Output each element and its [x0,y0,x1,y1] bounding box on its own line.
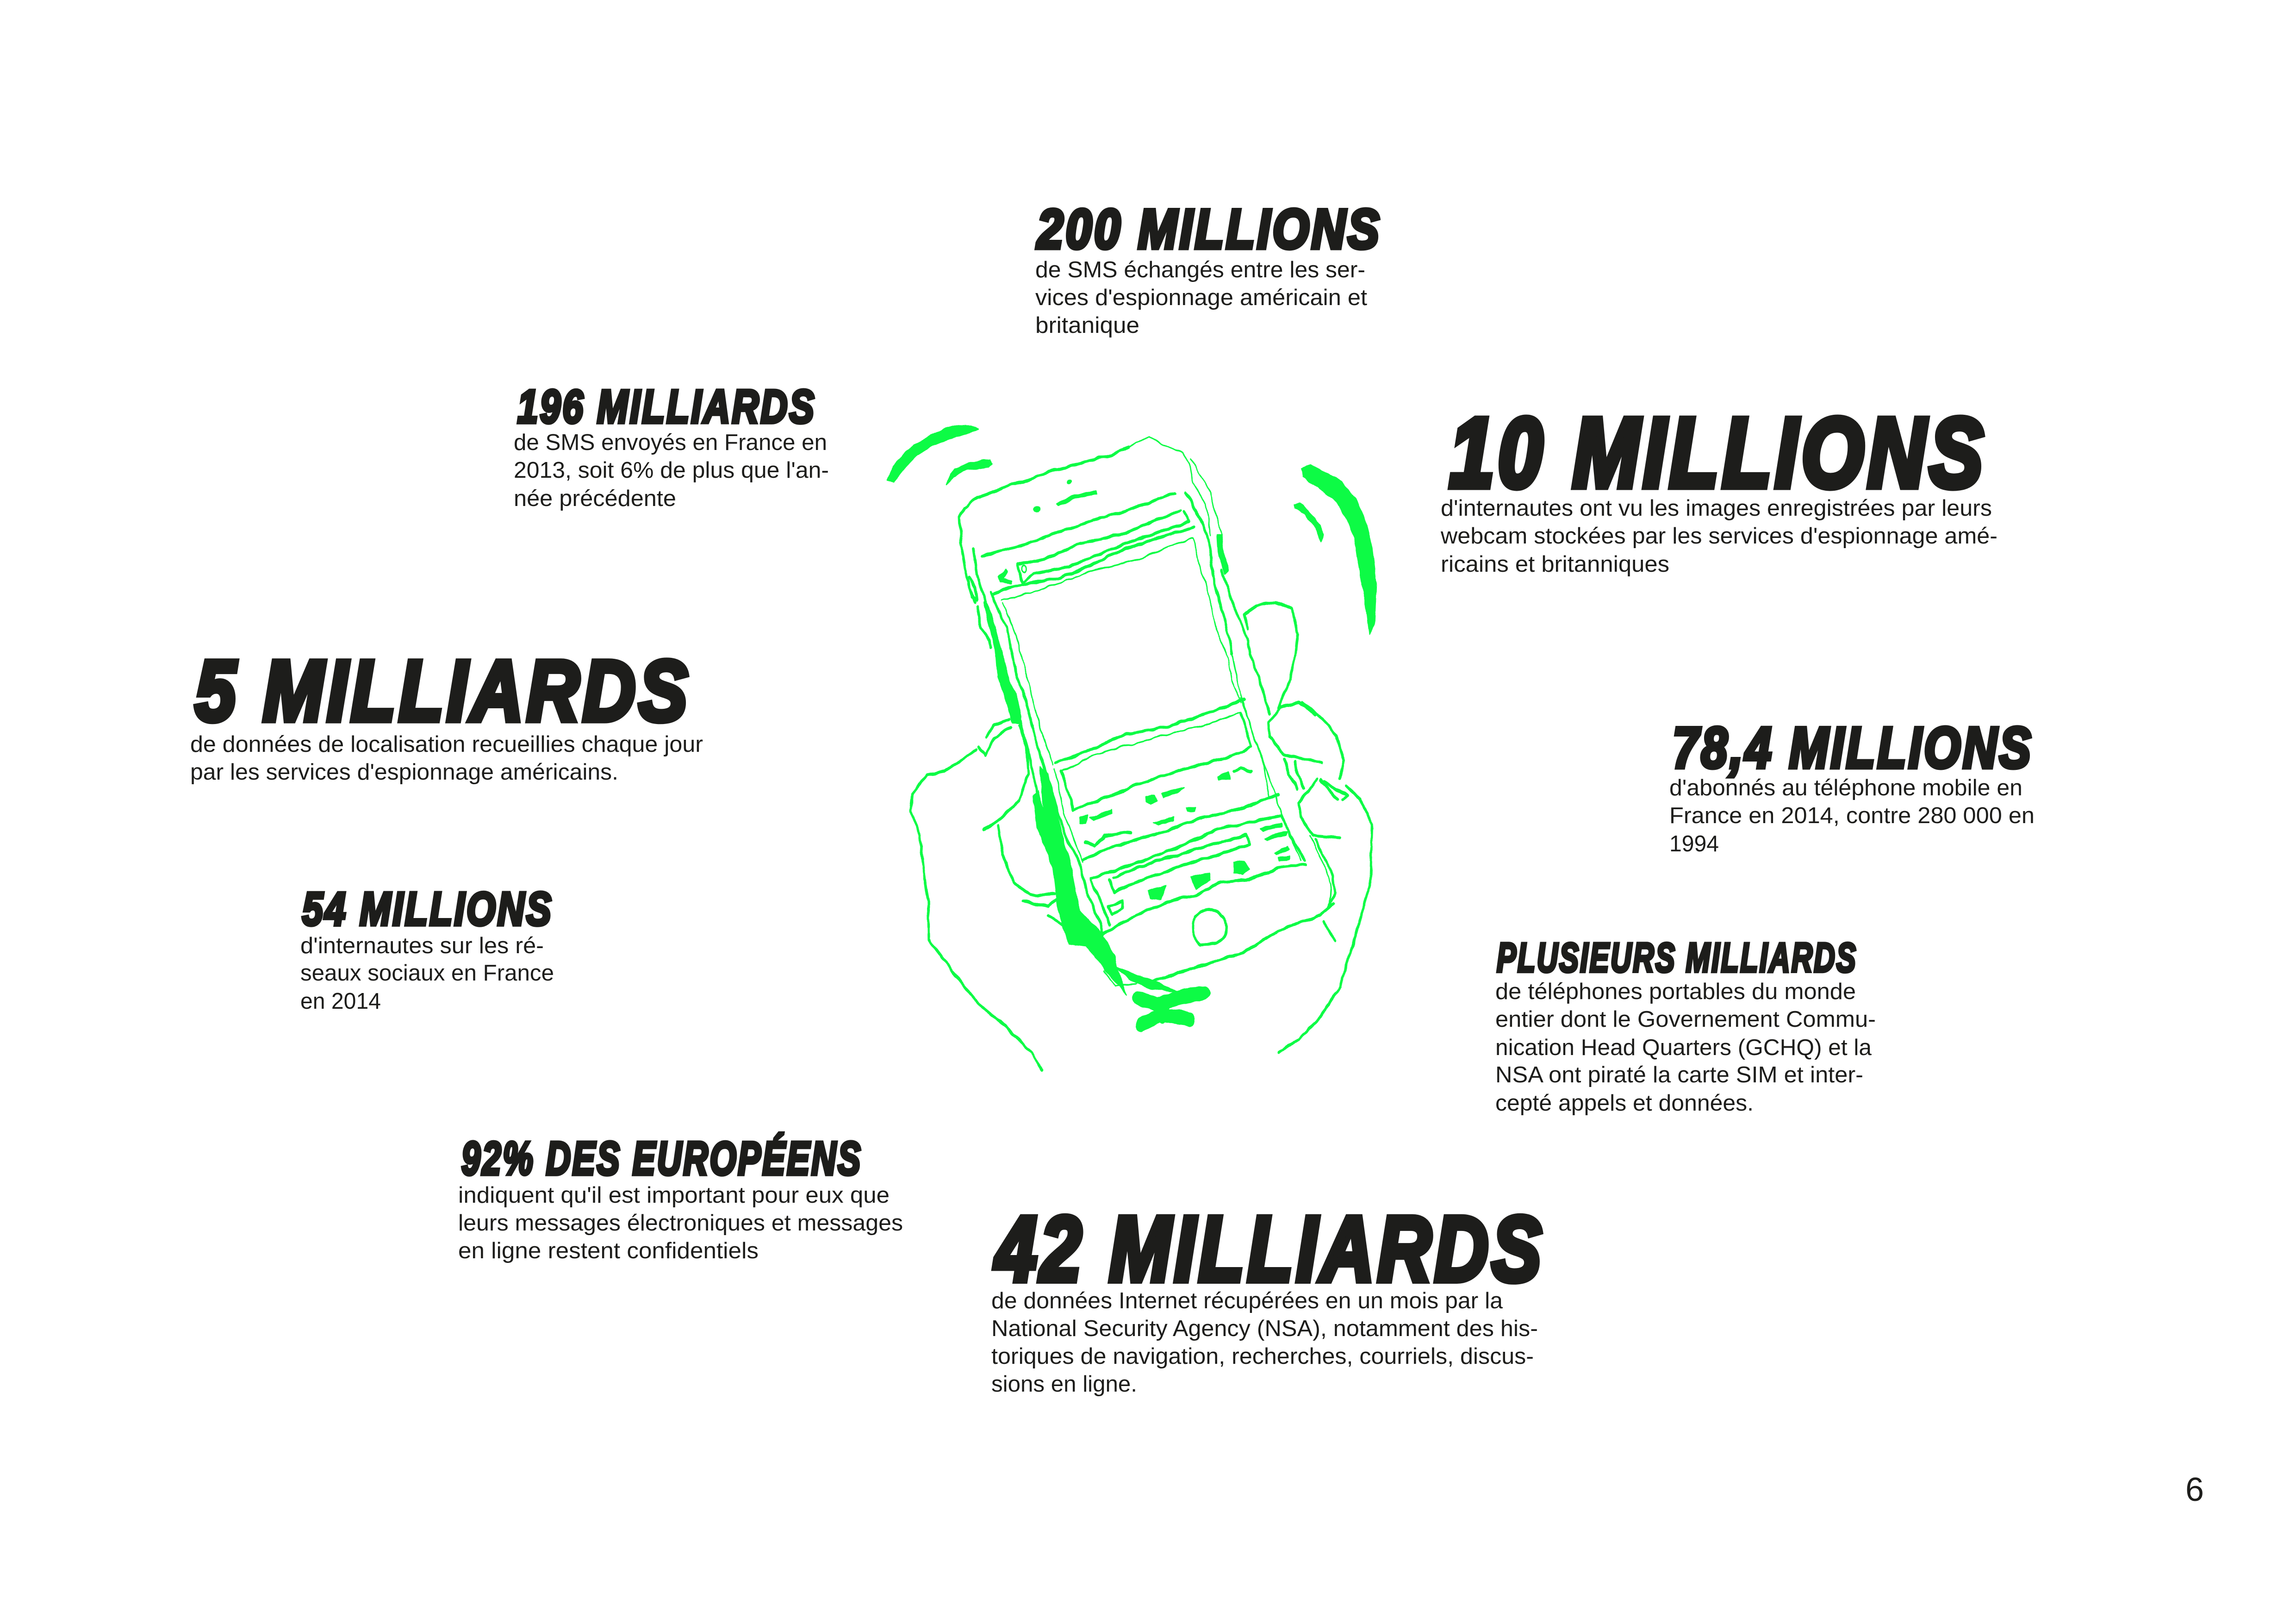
description: 200 millions: vices d'espionnage américain et [1035,285,1367,310]
icon: home button [1193,910,1226,945]
description: plusieurs milliards [1495,979,1876,1116]
description: 200 millions: britanique [1035,313,1139,338]
stat: 5 milliards [190,643,703,785]
phone address bar [982,493,1195,600]
description: 78,4 millions: France en 2014, contre 280 000 en [1669,803,2035,828]
heading: 10 millions: 10 MILLIONS [1450,398,1987,507]
description: 78,4 millions [1669,775,2035,856]
description: 10 millions: ricains et britanniques [1441,552,1669,577]
description: plusieurs milliards: NSA ont piraté la carte SIM et inter- [1495,1062,1863,1087]
heading: 200 millions: 200 MILLIONS [1036,198,1381,260]
description: 54 millions [300,933,554,1014]
description: 54 millions: en 2014 [300,989,381,1014]
description: 200 millions [1035,257,1367,338]
description: 196 milliards: 2013, soit 6% de plus que l'an- [514,458,829,483]
stat: 10 millions [1440,398,1997,577]
page number: 6 [2185,1471,2204,1508]
description: 5 milliards [190,732,703,785]
description: 54 millions: seaux sociaux en France [300,961,554,986]
description: 92% des européens: leurs messages électroniques et messages [458,1211,903,1236]
description: 42 milliards [991,1288,1538,1397]
stat: 78,4 millions [1669,716,2035,856]
description: 78,4 millions: 1994 [1669,831,1719,856]
heading: 54 millions: 54 MILLIONS [302,883,553,935]
phone top: speaker and camera [1034,480,1096,512]
description: plusieurs milliards: entier dont le Governement Commu- [1495,1007,1876,1032]
heading: 78,4 millions: 78,4 MILLIONS [1673,716,2033,780]
description: 42 milliards: sions en ligne. [991,1372,1137,1397]
stat: 92% des européens [458,1133,903,1263]
phone body outline [960,437,1335,986]
stat: 200 millions [1035,198,1381,338]
icon: vibration arcs [887,425,1376,635]
description: 200 millions: de SMS échangés entre les ser- [1035,257,1365,282]
description: 92% des européens: indiquent qu'il est important pour eux que [458,1183,890,1208]
illustration: hands holding a vibrating smartphone [887,425,1376,1070]
right hand [1244,602,1372,1052]
heading: 196 milliards: 196 MILLIARDS [517,381,816,433]
description: 78,4 millions: d'abonnés au téléphone mobile en [1669,775,2022,800]
description: 92% des européens: en ligne restent confidentiels [458,1238,759,1263]
description: plusieurs milliards: nication Head Quarters (GCHQ) et la [1495,1035,1872,1060]
description: 10 millions [1440,496,1997,577]
description: 10 millions: webcam stockées par les services d'espionnage amé- [1440,524,1997,549]
thick side smear of the phone [984,535,1229,995]
description: plusieurs milliards: de téléphones portables du monde [1495,979,1856,1004]
description: plusieurs milliards: cepté appels et données. [1495,1091,1754,1116]
description: 42 milliards: National Security Agency (NSA), notamment des his- [991,1316,1538,1341]
heading: 92% des européens: 92% DES EUROPÉENS [461,1133,862,1185]
description: 196 milliards: de SMS envoyés en France en [514,430,827,455]
heading: 5 milliards: 5 MILLIARDS [195,643,691,739]
phone screen: content lines [1056,538,1289,915]
stat: 196 milliards [514,381,829,511]
thick scribble under the phone [1138,993,1204,1025]
description: 54 millions: d'internautes sur les ré- [300,933,544,958]
stat: 54 millions [300,883,554,1014]
left hand [911,577,1069,1070]
description: 42 milliards: de données Internet récupérées en un mois par la [991,1288,1503,1313]
heading: 42 milliards: 42 MILLIARDS [994,1198,1545,1300]
description: 196 milliards: née précédente [514,486,676,511]
stat: plusieurs milliards [1495,934,1876,1116]
description: 196 milliards [514,430,829,511]
description: 5 milliards: par les services d'espionnage américains. [190,760,618,785]
heading: plusieurs milliards: PLUSIEURS MILLIARDS [1497,934,1857,981]
description: 92% des européens [458,1183,903,1263]
description: 5 milliards: de données de localisation recueillies chaque jour [190,732,703,757]
stat: 42 milliards [991,1198,1545,1397]
description: 42 milliards: toriques de navigation, recherches, courriels, discus- [991,1344,1534,1369]
description: 10 millions: d'internautes ont vu les images enregistrées par leurs [1441,496,1992,521]
